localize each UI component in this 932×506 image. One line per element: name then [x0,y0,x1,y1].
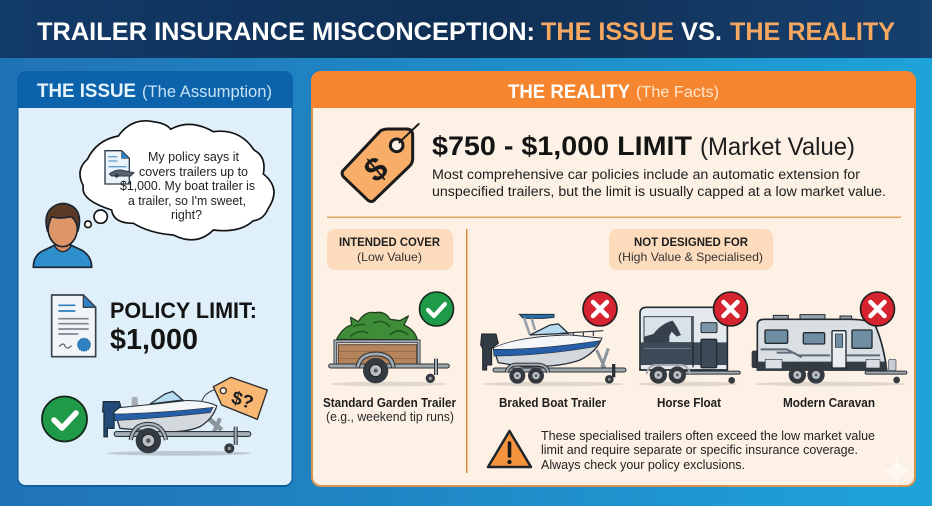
cross mark [860,292,894,326]
policy limit text [110,298,257,356]
thought bubble: right? [171,207,202,222]
limit heading: (Market Value) [700,133,855,161]
icon: price tag: $ [357,149,396,190]
panel: the reality [311,71,916,487]
heading: the issue [37,80,272,102]
limit heading [432,131,855,161]
icon: green check [42,396,87,442]
label: not designed for: (High Value & Specialised) [618,250,763,264]
heading: the issue: THE ISSUE [37,80,136,102]
label: intended cover: INTENDED COVER [339,235,440,249]
check mark [420,292,454,326]
icon: warning triangle [488,431,531,467]
icon: boat on trailer with price tag: $? [229,387,256,413]
heading: the issue: (The Assumption) [142,83,272,101]
warning note: Always check your policy exclusions. [541,458,745,472]
horse float caption: Horse Float [657,396,722,410]
title banner [0,0,932,58]
cross mark [583,292,617,326]
title banner: THE ISSUE [541,18,674,46]
boat trailer [481,292,624,386]
icon: policy document [52,295,96,357]
limit description [432,167,886,199]
title banner: VS. [681,18,722,46]
limit heading: $750 - $1,000 LIMIT [432,131,693,161]
icon: boat on trailer with price tag [103,377,267,456]
warning note [541,429,875,472]
caravan [752,292,905,386]
icon: person [33,203,92,267]
limit description: unspecified trailers, but the limit is usually capped at a low market value. [432,184,886,199]
heading: the reality [508,81,719,103]
garden trailer caption: Standard Garden Trailer [323,396,456,410]
label: intended cover: (Low Value) [357,250,422,264]
cross mark [714,292,748,326]
label: intended cover [327,229,453,270]
boat trailer caption: Braked Boat Trailer [499,396,606,410]
policy limit text: POLICY LIMIT: [110,298,257,323]
icon: price tag [342,124,419,202]
panel: the issue [17,71,293,487]
garden trailer caption: (e.g., weekend tip runs) [326,410,454,424]
heading: the reality: THE REALITY [508,81,630,103]
caravan caption: Modern Caravan [783,396,875,410]
limit description: Most comprehensive car policies include an automatic extension for [432,167,861,182]
thought bubble: covers trailers up to [139,164,248,179]
thought bubble: My policy says it [148,149,239,164]
title banner: TRAILER INSURANCE MISCONCEPTION: [37,18,535,46]
warning note: limit and require separate or specific insurance coverage. [541,443,858,457]
thought bubble [80,121,274,240]
label: not designed for [609,229,773,270]
heading: the reality: (The Facts) [636,84,719,101]
label: not designed for: NOT DESIGNED FOR [634,235,748,249]
horse float [638,292,748,386]
thought bubble: $1,000. My boat trailer is [120,178,255,193]
title banner: THE REALITY [730,18,895,46]
warning note: These specialised trailers often exceed the low market value [541,429,875,443]
garden trailer [330,292,454,386]
policy limit text: $1,000 [110,324,198,356]
thought bubble: a trailer, so I'm sweet, [128,193,246,208]
garden trailer caption [323,396,456,424]
